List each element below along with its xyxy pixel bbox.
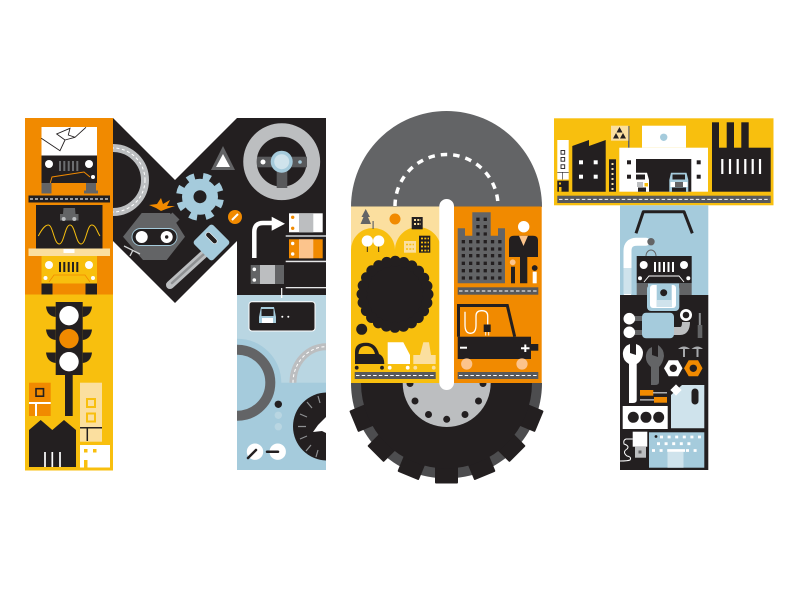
letter T — [554, 118, 774, 470]
road — [458, 372, 538, 379]
white exhaust tube — [624, 242, 646, 294]
arrow — [254, 217, 285, 258]
white garage — [619, 126, 708, 192]
panel: black tools — [620, 285, 708, 470]
icon: gray spanner — [646, 345, 664, 385]
icon: electric car — [458, 306, 538, 370]
orange building — [29, 383, 51, 416]
letter M — [25, 118, 326, 470]
warning triangle — [211, 146, 235, 170]
orange screwdrivers — [640, 390, 667, 403]
keyboard — [649, 432, 704, 468]
white car — [636, 173, 649, 192]
pistons — [624, 309, 692, 338]
icon: orange nut — [684, 360, 702, 376]
icon: white nut — [664, 360, 682, 376]
MOT sign — [611, 126, 630, 148]
black factory — [572, 140, 606, 192]
panel: steering wheel and parts — [237, 118, 326, 295]
narrow tower — [609, 159, 616, 192]
black houses — [29, 420, 76, 467]
icon: white spanner — [623, 344, 643, 403]
scalloped gear — [362, 261, 428, 327]
panel: dashboard — [237, 295, 326, 470]
oil sump — [647, 285, 679, 311]
screwdriver — [698, 313, 702, 338]
gray part card — [251, 265, 326, 288]
road arc — [293, 347, 326, 383]
icon: traffic light — [46, 302, 92, 416]
white building — [80, 445, 110, 468]
tyre ring — [237, 338, 282, 421]
knobs — [247, 444, 286, 460]
gray cap — [646, 238, 656, 256]
white part card — [286, 213, 326, 237]
panel: orange scene — [454, 206, 542, 383]
panel: yellow traffic light — [25, 294, 113, 470]
icon: black car — [355, 343, 384, 370]
engine block — [623, 406, 668, 429]
icon: black car with cracked windscreen — [41, 127, 98, 194]
icon: cream car — [413, 342, 436, 370]
road — [458, 287, 538, 295]
yellow window building — [419, 236, 430, 253]
orange part card — [286, 239, 326, 262]
oil jug — [670, 384, 704, 428]
small black building — [412, 217, 423, 229]
white tower — [557, 140, 569, 192]
gauge — [293, 392, 326, 460]
indicator dots — [275, 401, 282, 430]
icon: engine with spark — [123, 198, 185, 260]
cream building — [404, 241, 416, 253]
letter O — [349, 111, 544, 484]
icon: gear — [177, 174, 223, 220]
road — [355, 372, 436, 379]
panel: orange cars — [25, 118, 113, 295]
small dot — [356, 324, 367, 335]
office building — [458, 212, 505, 283]
icon: bolts — [678, 346, 703, 357]
usb plug with cable — [620, 432, 647, 461]
screen with car and wave — [36, 205, 102, 248]
road — [28, 196, 110, 202]
white trees — [362, 235, 384, 252]
icon: car front — [637, 256, 692, 295]
person in suit — [509, 221, 538, 283]
icon: white car — [388, 342, 410, 370]
panel: yellow scene — [351, 206, 441, 383]
cream building — [80, 383, 102, 442]
panel: dark V of M — [113, 118, 237, 303]
screen with car — [249, 302, 315, 331]
sun — [390, 214, 400, 224]
gray road ring — [113, 144, 149, 216]
center white slot — [439, 199, 454, 390]
panel: blue stem — [620, 205, 708, 295]
bumper frame — [636, 212, 692, 233]
blue car — [669, 173, 688, 192]
orange dial — [228, 210, 242, 224]
panel: garage skyline — [554, 118, 774, 205]
tyre — [349, 380, 544, 484]
icon: yellow car — [28, 248, 110, 295]
icon: car key — [170, 223, 231, 285]
road — [557, 196, 771, 203]
chimney factory — [712, 122, 771, 192]
icon: pine tree — [360, 209, 374, 229]
icon: steering wheel — [250, 130, 313, 193]
road semicircle — [351, 111, 542, 207]
illustration: MOT lettering — [25, 111, 774, 484]
